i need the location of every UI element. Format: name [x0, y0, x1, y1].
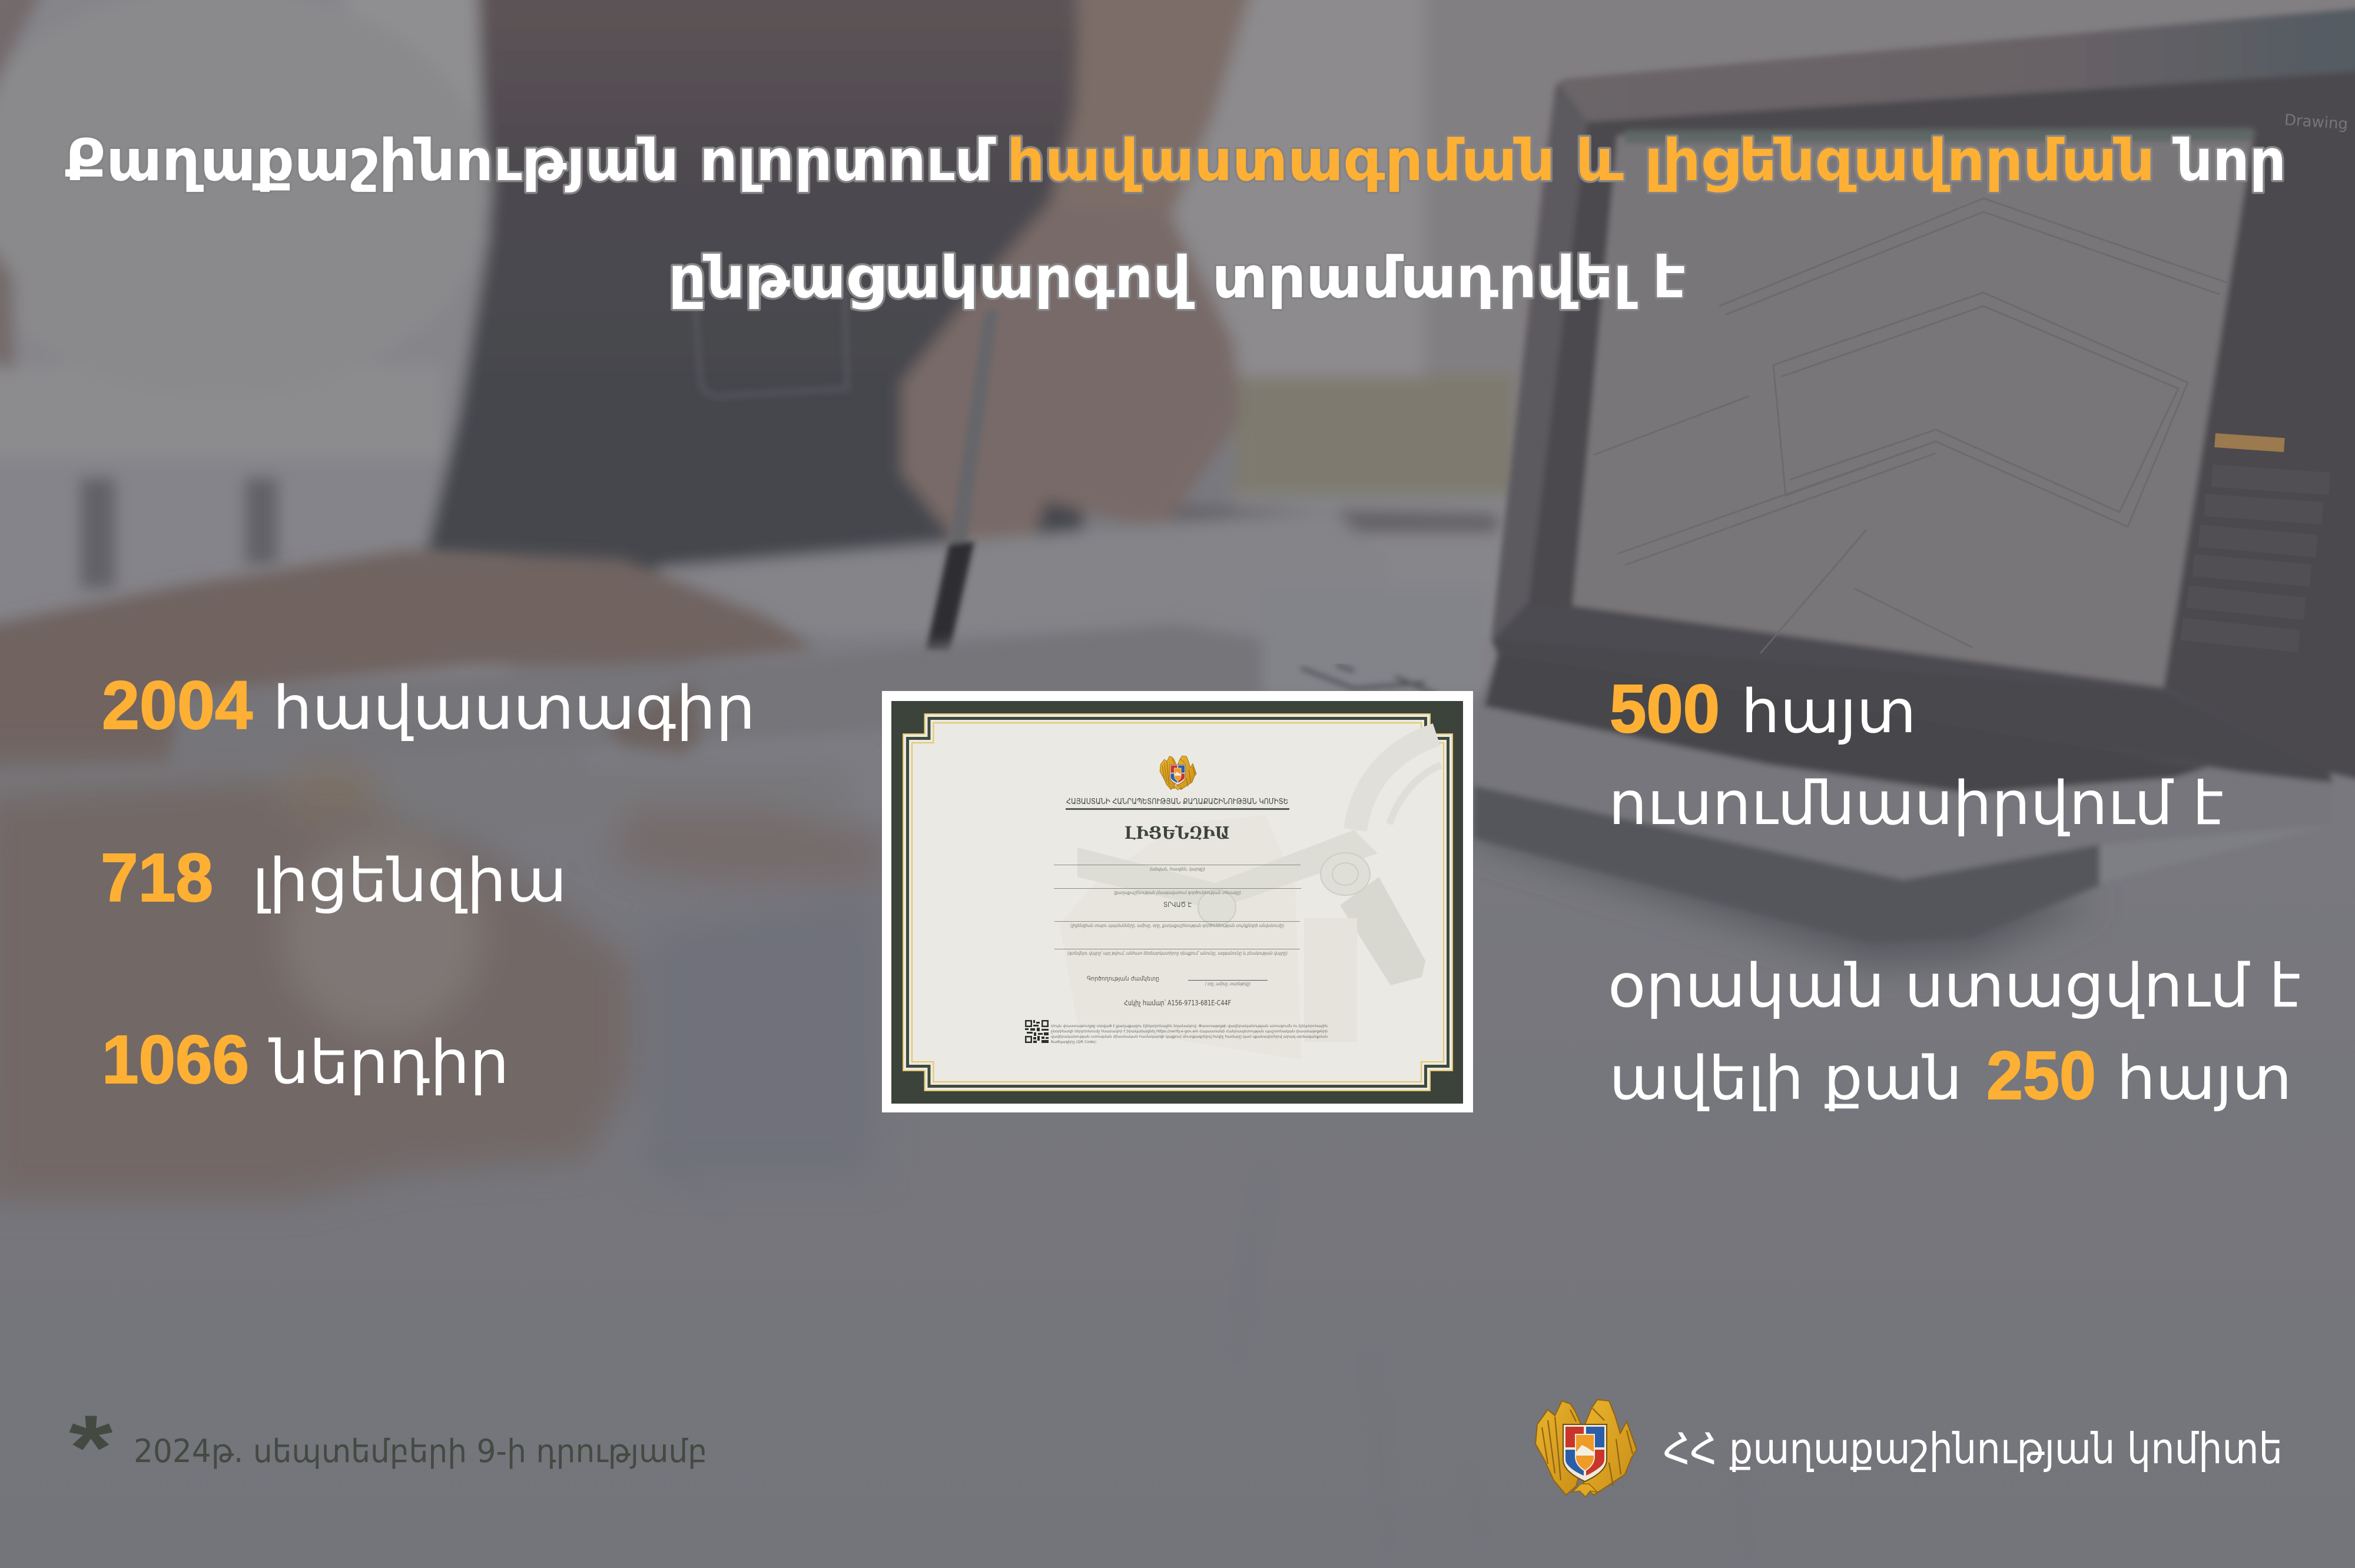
- title: [65, 127, 2286, 311]
- certificate emblem: [1160, 756, 1196, 790]
- certificate captions: ՏՐՎԱԾ Է: [1163, 901, 1192, 909]
- dark green mat: [891, 701, 1463, 1104]
- certificate verification note: Սույն փաստաթուղթը տրված է քաղաքացու էլեկտրոնային եղանակով: Փաստաթղթի վավերականության ստուգումն ու էլեկտրոնային: [1051, 1024, 1328, 1028]
- watermark: architectural column: [1060, 735, 1441, 1059]
- title line 1 white end: նոր: [2172, 127, 2286, 194]
- stat: licenses: 718: [101, 839, 213, 916]
- faint blueprint marks on table: [648, 1148, 1749, 1560]
- stats left column: [101, 667, 755, 1098]
- certificate captions: (գտնվելու վայրը՝ այդ թվում, անհատ ձեռնարկատիրոջ դեպքում՝ անունը, ազգանունը և բնակության վայրը): [1067, 951, 1288, 956]
- stat: applications under review: 500: [1610, 670, 1720, 747]
- sidebar orange button on laptop screen: [2214, 433, 2285, 452]
- certificate form lines: [1054, 865, 1301, 981]
- stat: applications under review: հայտ: [1741, 677, 1916, 747]
- certificate image: [882, 691, 1473, 1112]
- stat: applications under review: ուսումնասիրվում է: [1608, 769, 2224, 839]
- certificate verification note: ընօրինակի ներբեռնումը հնարավոր է իրականացնել https://verify.e-gov.am Հայաստանի Հանրապետության պաշտոնական փաստաթղթերի: [1051, 1029, 1328, 1034]
- icon: coat of arms of Armenia: [1535, 1400, 1637, 1497]
- certificate captions: ( օրը, ամիսը, տարեթիվը): [1205, 981, 1251, 986]
- left paper keyboard marks: [1301, 665, 1437, 695]
- certificate heading rule: [1066, 808, 1289, 810]
- faint drawing on laptop screen: [1593, 198, 2230, 653]
- stat: daily applications: ավելի քան: [1609, 1044, 1962, 1114]
- laptop: [1301, 7, 2355, 965]
- title line 2: ընթացակարգով տրամադրվել է: [668, 244, 1686, 311]
- white frame: [882, 691, 1473, 1112]
- certificate captions: (անվան, հասցեն, կարգը): [1150, 866, 1205, 872]
- certificate verification note: ծածկագիրը (QR Code):: [1051, 1039, 1097, 1044]
- stat: daily applications: օրական ստացվում է: [1608, 951, 2301, 1021]
- stat: permits: 1066: [102, 1021, 249, 1098]
- certificate QR code: [1025, 1020, 1049, 1043]
- certificate authority heading: ՀԱՅԱՍՏԱՆԻ ՀԱՆՐԱՊԵՏՈՒԹՅԱՆ ՔԱՂԱՔԱՇԻՆՈՒԹՅԱՆ ԿՈՄԻՏԵ: [1066, 798, 1288, 806]
- keyboard deck: [1474, 655, 2333, 880]
- certificate captions: Գործողության ժամկետը: [1087, 975, 1159, 982]
- sidebar heading on laptop screen: Drawing: [2284, 111, 2349, 134]
- stat: permits: [102, 1021, 509, 1098]
- footnote: [69, 1397, 707, 1499]
- stat: daily applications: [1608, 951, 2301, 1114]
- certificate control number: Հսկիչ համար՝ A156-9713-681E-C44F: [1124, 999, 1231, 1007]
- sidebar rows on laptop screen: [2181, 464, 2330, 652]
- hands resting on paper: [0, 550, 1260, 1201]
- certificate captions: (լիցենզիան տալու պայմանները, ամիսը, օրը, քաղաքաշինության գործունեության սույնքնդրի անվանումը): [1070, 923, 1284, 928]
- certificate verification note: [1051, 1024, 1328, 1044]
- stats right column: [1608, 670, 2301, 1114]
- stat: permits: ներդիր: [268, 1028, 509, 1098]
- lid: [1491, 7, 2355, 783]
- certificate verification note: վավերականության ստուգման միասնական համակարգի կայքում մուտքագրելով հսկիչ համարը կամ սքանավորելով արագ արձագանքման: [1051, 1034, 1328, 1039]
- footer logo and committee name: [1535, 1400, 2283, 1497]
- certificate captions: [1067, 866, 1288, 986]
- footnote date text: 2024թ. սեպտեմբերի 9-ի դրությամբ: [134, 1433, 707, 1470]
- stat: licenses: լիցենզիա: [252, 846, 567, 916]
- stepped border and paper: [908, 718, 1448, 1087]
- stat: daily applications: հայտ: [2117, 1044, 2292, 1114]
- stat: certificates: 2004: [102, 667, 253, 743]
- stat: daily applications: 250: [1986, 1037, 2096, 1114]
- title line 1 white start: Քաղաքաշինության ոլորտում: [65, 127, 996, 194]
- stat: certificates: հավաստագիր: [273, 673, 755, 743]
- certificate captions: (քաղաքաշինության բնագավառում գործունեության տեսակը): [1114, 890, 1241, 895]
- stat: certificates: [102, 667, 755, 743]
- title line 1 orange highlight: հավաստագրման և լիցենզավորման: [1007, 127, 2155, 194]
- footnote asterisk: *: [69, 1397, 112, 1499]
- committee name: ՀՀ քաղաքաշինության կոմիտե: [1663, 1424, 2283, 1473]
- pen in hand: [926, 309, 999, 693]
- belt and buckle: [694, 288, 847, 397]
- stat: applications under review: [1608, 670, 2224, 839]
- stat: licenses: [101, 839, 567, 916]
- certificate title: ԼԻՑԵՆԶԻԱ: [1125, 823, 1230, 843]
